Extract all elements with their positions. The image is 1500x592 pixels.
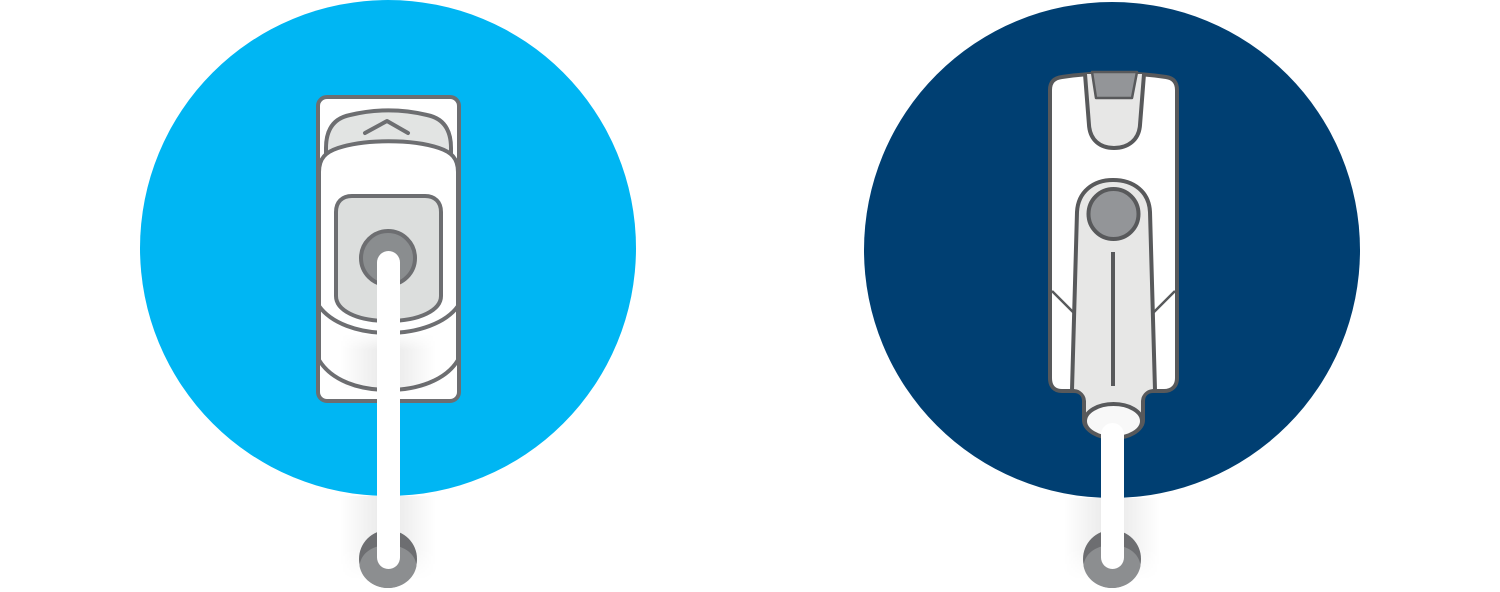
top slot: [1085, 74, 1144, 148]
cable shadow below circle: [1081, 498, 1143, 554]
navy circle: [864, 2, 1360, 498]
cable shadow below circle: [357, 496, 419, 554]
shadow on slider: [357, 340, 419, 388]
round button: [1088, 189, 1138, 239]
inner recessed panel: [336, 196, 441, 321]
white cable: [377, 251, 400, 569]
cable collar: [1085, 404, 1142, 438]
bottom node: [359, 530, 417, 588]
device base plate: [318, 97, 459, 401]
slider body: [319, 141, 458, 390]
slot window: [1092, 72, 1137, 98]
handle: [1072, 180, 1155, 420]
chevron: [365, 121, 408, 133]
light blue circle: [140, 0, 636, 496]
center line: [1111, 252, 1115, 386]
device body: [1050, 73, 1177, 438]
button circle: [361, 231, 415, 285]
left panel: sliding device on light blue circle: [140, 0, 636, 588]
raised tab: [326, 110, 451, 165]
white cable: [1101, 423, 1124, 569]
right panel: device underside on navy circle: [864, 2, 1360, 588]
side lines: [1052, 291, 1175, 313]
bottom node: [1083, 530, 1141, 588]
